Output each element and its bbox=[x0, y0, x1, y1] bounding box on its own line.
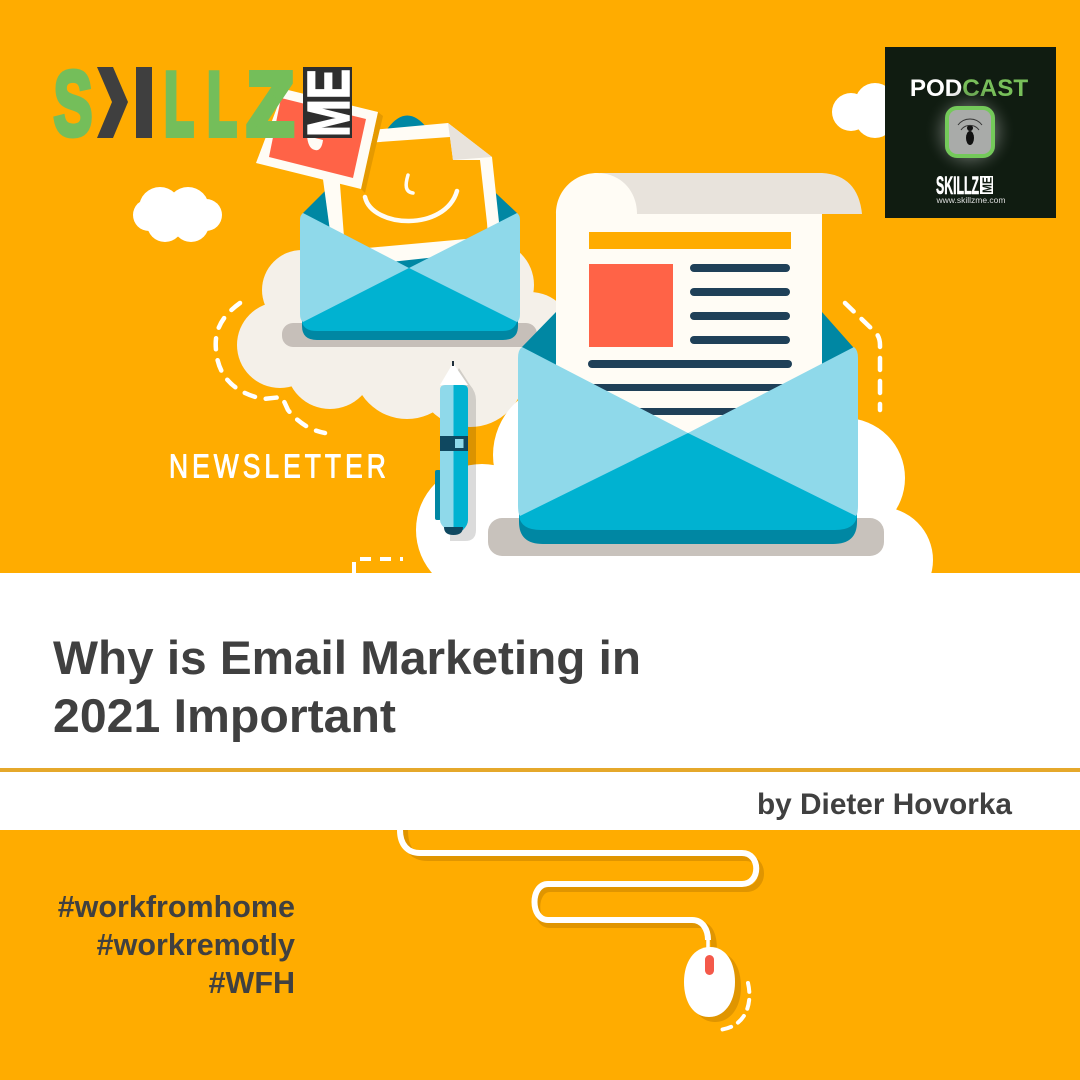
photo card bbox=[256, 89, 383, 193]
logo letters LLZ: L bbox=[164, 54, 194, 154]
newsletter label: NEWSLETTER bbox=[169, 449, 386, 485]
mouse shadow bbox=[690, 952, 741, 1022]
mouse button bbox=[705, 955, 714, 975]
title: Why is Email Marketing in bbox=[53, 632, 641, 685]
small envelope bbox=[300, 116, 520, 340]
badge logo: SKILLZ bbox=[936, 172, 979, 200]
pen body bbox=[440, 385, 454, 530]
hashtags: #WFH bbox=[209, 966, 295, 1000]
white title band bbox=[0, 573, 1080, 830]
icon: mouse with cable bbox=[400, 830, 761, 1030]
logo ME block: ME bbox=[296, 69, 362, 137]
icon: white cloud behind podcast badge bbox=[832, 83, 895, 138]
letter with smiley bbox=[317, 123, 502, 268]
badge logo bbox=[936, 172, 994, 200]
bottom dark edge shadow bar bbox=[488, 518, 884, 556]
author byline: by Dieter Hovorka bbox=[757, 788, 1012, 821]
dashed flight path left bbox=[216, 303, 325, 433]
envelope back flap bbox=[303, 116, 517, 280]
mouse body bbox=[684, 947, 735, 1017]
page header bar bbox=[589, 232, 791, 249]
envelope front bottom bbox=[302, 268, 518, 340]
title bbox=[53, 632, 641, 743]
envelope right flap bbox=[409, 213, 520, 322]
dashed path right bbox=[845, 303, 880, 410]
page image block bbox=[589, 264, 673, 347]
big right flap bbox=[688, 347, 858, 516]
pen shadow bbox=[450, 368, 476, 541]
divider line bbox=[0, 768, 1080, 772]
pen cap bbox=[444, 527, 463, 535]
cable bbox=[400, 830, 756, 940]
badge url: www.skillzme.com bbox=[936, 195, 1005, 205]
hashtags: #workfromhome bbox=[58, 890, 295, 924]
dashed path bottom bbox=[354, 559, 403, 573]
badge icon bbox=[947, 108, 993, 156]
badge logo: ME bbox=[980, 177, 994, 193]
badge title: PODCAST bbox=[910, 75, 1028, 102]
envelope left flap bbox=[300, 213, 409, 322]
logo letter I bbox=[136, 67, 152, 138]
newsletter page bbox=[556, 173, 862, 440]
big left flap bbox=[518, 347, 688, 516]
big envelope front bbox=[488, 347, 884, 556]
logo letter S: S bbox=[54, 53, 92, 155]
icon: small white cloud left bbox=[133, 187, 222, 242]
hashtags: #workremotly bbox=[97, 928, 295, 962]
mouse dashes bbox=[718, 983, 749, 1030]
title: 2021 Important bbox=[53, 690, 396, 743]
logo letters LLZ: L bbox=[208, 54, 236, 154]
cable shadow bbox=[405, 830, 761, 950]
icon: beige cloud behind small envelope bbox=[237, 241, 573, 427]
podcast badge bbox=[885, 47, 1056, 218]
icon: pen bbox=[435, 361, 476, 541]
logo: SKILLZ ME bbox=[54, 53, 362, 155]
logo letters LLZ: Z bbox=[247, 54, 294, 154]
badge glow bbox=[924, 86, 1016, 178]
big envelope back bbox=[522, 312, 853, 440]
page text lines bbox=[588, 264, 792, 415]
pen clip bbox=[435, 470, 441, 520]
logo letters LLZ bbox=[164, 54, 294, 154]
logo chevron bbox=[97, 67, 128, 138]
pen band bbox=[440, 436, 468, 451]
pen tip bbox=[440, 363, 468, 385]
small envelope shadow bbox=[282, 323, 537, 347]
icon: big white cloud bbox=[416, 383, 933, 613]
